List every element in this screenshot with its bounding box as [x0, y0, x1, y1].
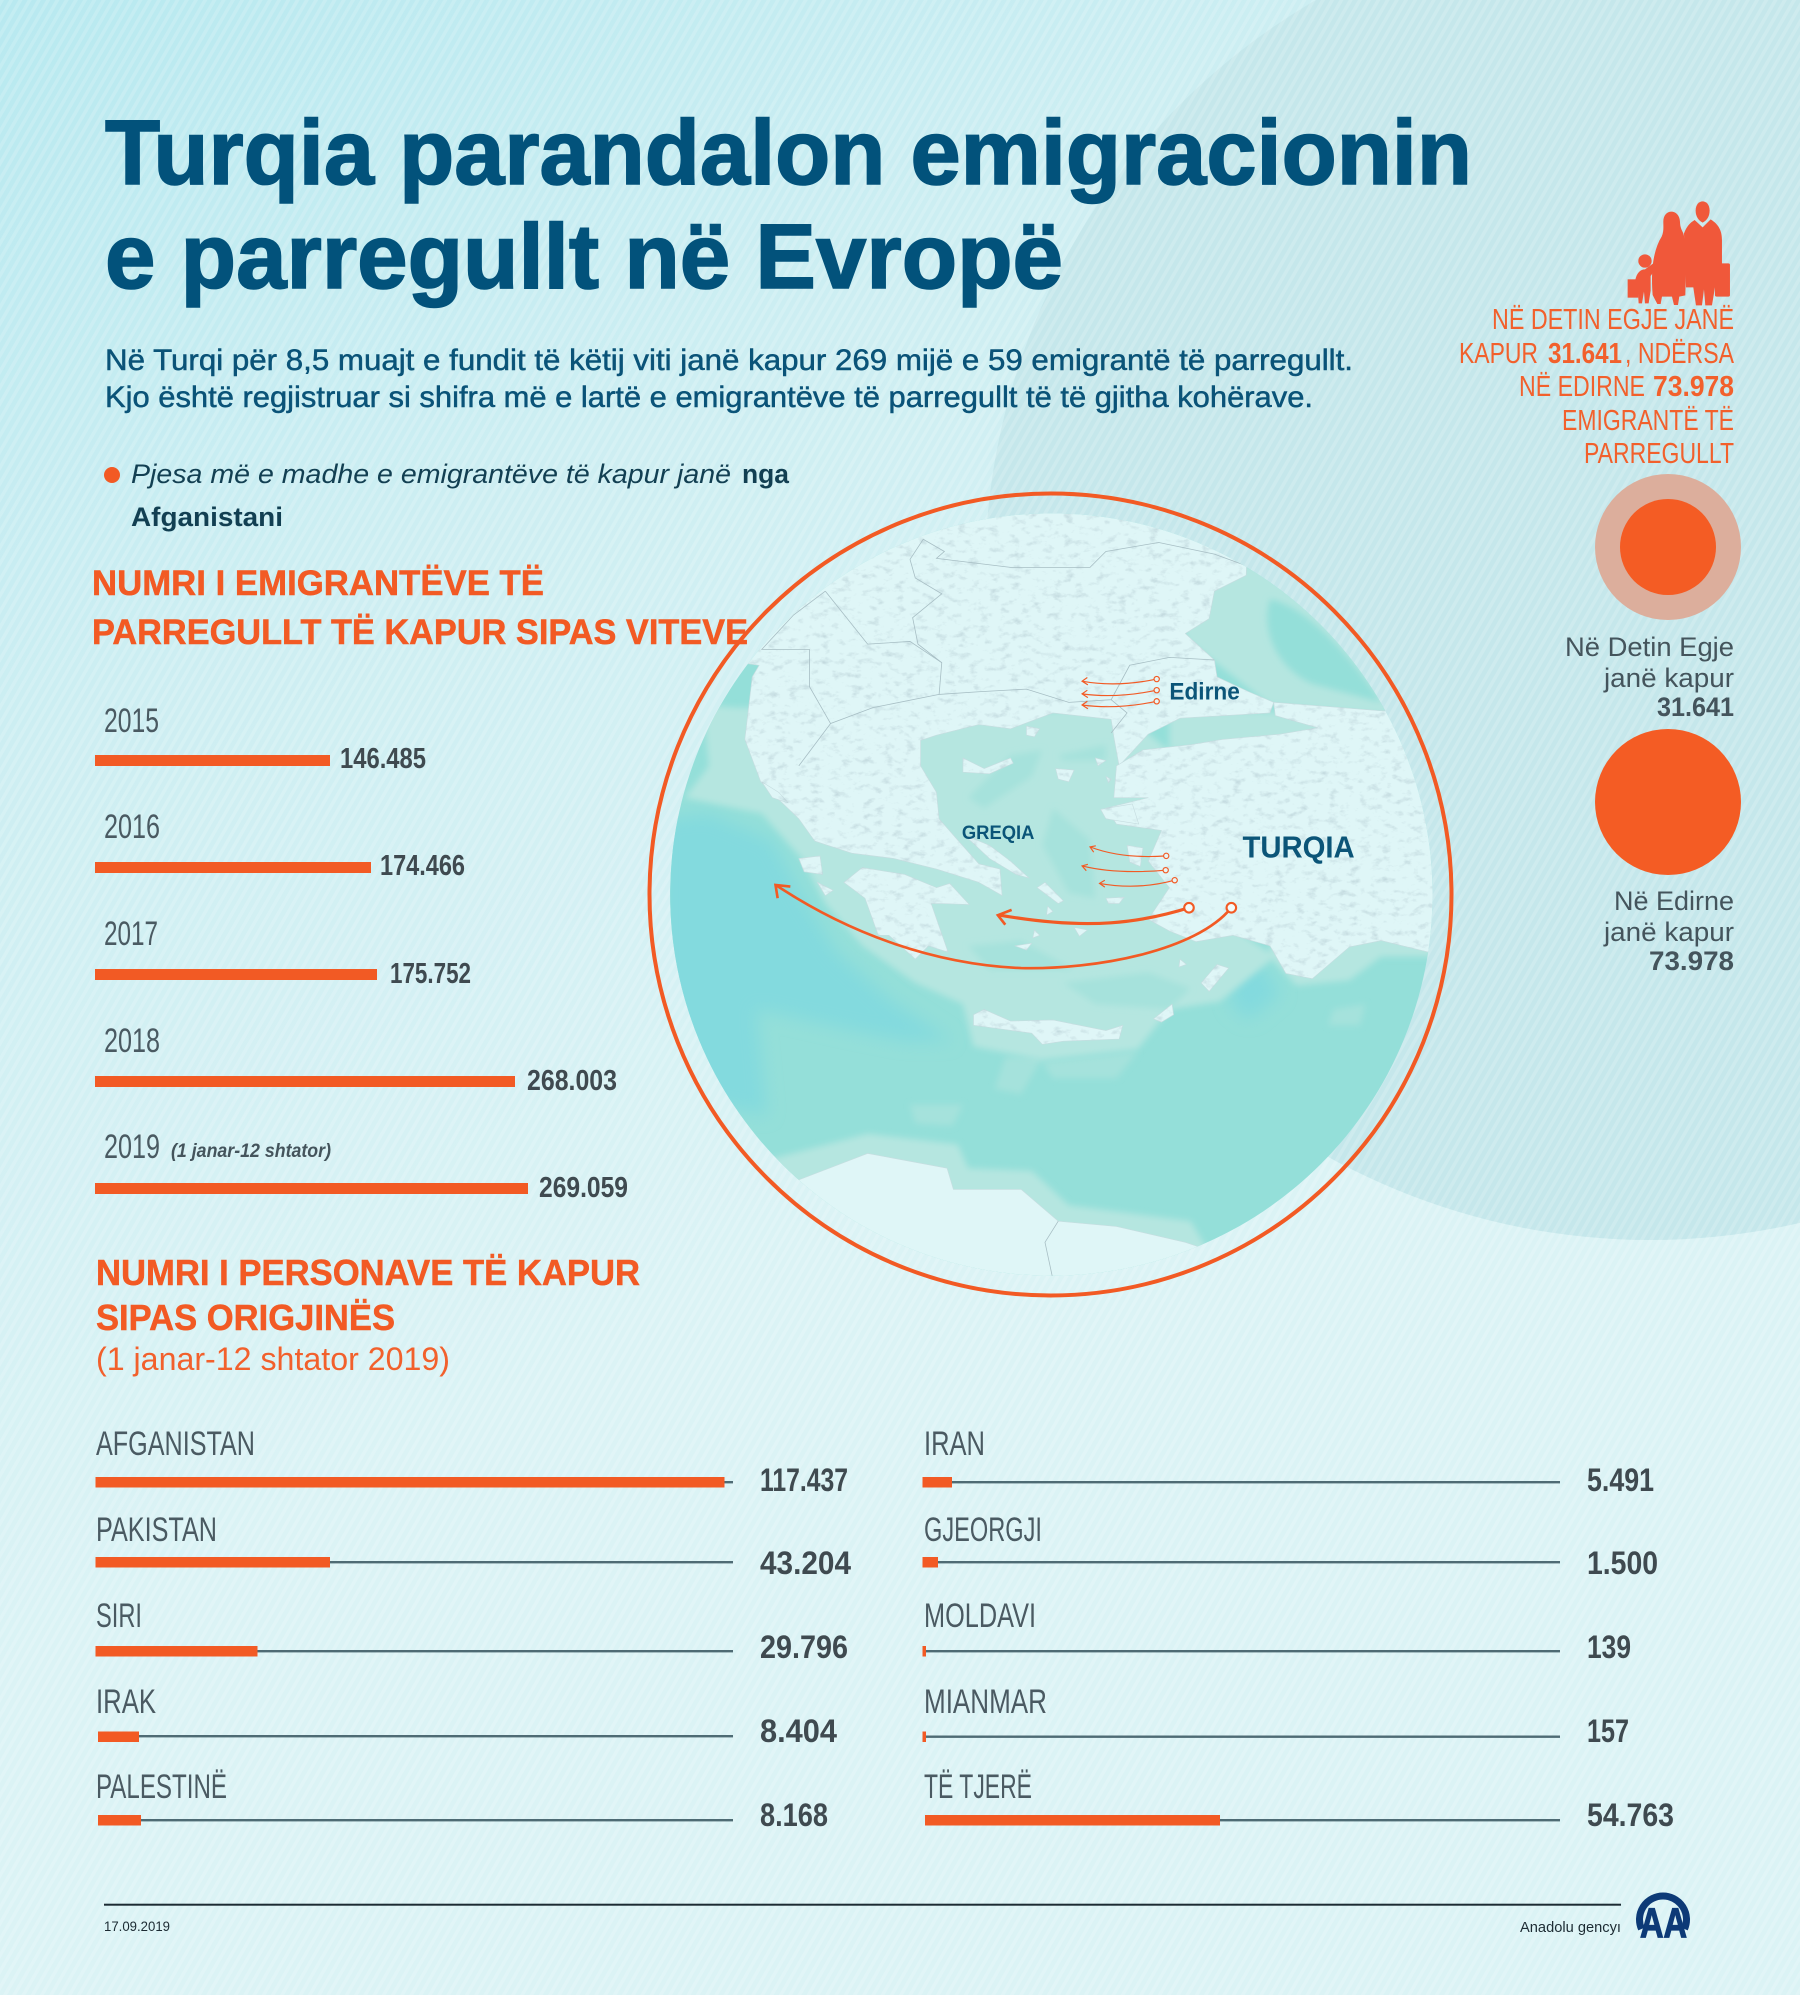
map: sea and land: [670, 514, 1432, 1276]
footer rule: [104, 1904, 1621, 1906]
2017: 2017: [104, 915, 158, 953]
note: most migrants from Afghanistan: Pjesa më e madhe e emigrantëve të kapur janë: [131, 459, 731, 489]
map labels: Edirne: [1169, 679, 1240, 706]
2016: [95, 808, 465, 882]
Iran: IRAN: [924, 1425, 985, 1463]
heading: by origin: (1 janar-12 shtator 2019): [96, 1341, 450, 1377]
Pakistan: [96, 1511, 851, 1581]
Mianmar: 157: [1587, 1713, 1629, 1749]
Afganistan: 117.437: [760, 1462, 848, 1498]
heading: yearly totals: NUMRI I EMIGRANTËVE TË: [92, 564, 544, 603]
date: 17.09.2019: [104, 1918, 170, 1934]
bullet: [104, 467, 120, 483]
Iran: 5.491: [1587, 1462, 1654, 1498]
Irak: [96, 1683, 837, 1749]
2017: 175.752: [390, 958, 471, 990]
callout: Aegean and Edirne totals: NË DETIN EGJE JANË: [1492, 304, 1734, 336]
callout: Aegean and Edirne totals: [1459, 304, 1735, 470]
note: most migrants from Afghanistan: [104, 459, 790, 532]
bar chart: origin left column: [96, 1425, 851, 1833]
intro paragraph: Kjo është regjistruar si shifra më e lartë e emigrantëve të parregullt të të gjitha kohërave.: [105, 381, 1313, 414]
Moldavi: MOLDAVI: [924, 1597, 1036, 1635]
label: Aegean Sea count: [1565, 632, 1734, 722]
Palestinë: PALESTINË: [96, 1768, 227, 1806]
icon: AA logo: AA: [1640, 1900, 1687, 1946]
heading: yearly totals: [92, 564, 748, 652]
2015: [95, 702, 426, 775]
heading: by origin: NUMRI I PERSONAVE TË KAPUR: [96, 1252, 640, 1293]
label: Edirne count: 73.978: [1649, 946, 1734, 976]
2019: 2019: [104, 1128, 160, 1166]
callout: Aegean and Edirne totals: EMIGRANTË TË: [1562, 405, 1734, 437]
large background circle: [985, 0, 1800, 1240]
label: Edirne count: Në Edirne: [1614, 886, 1734, 916]
bar chart: origin right column: [922, 1425, 1674, 1833]
2019: 269.059: [539, 1172, 628, 1204]
heading: by origin: [96, 1252, 640, 1377]
callout: Aegean and Edirne totals: 31.641: [1548, 338, 1622, 370]
title: Turqia parandalon emigracionin: [105, 102, 1472, 204]
arrow: short route across the Aegean: [998, 903, 1194, 925]
callout: Aegean and Edirne totals: 73.978: [1653, 371, 1734, 403]
bar chart: migrants by year: [95, 702, 628, 1204]
Pakistan: 43.204: [760, 1545, 851, 1581]
Siri: SIRI: [96, 1597, 142, 1635]
Siri: [96, 1597, 848, 1665]
Palestinë: [96, 1768, 828, 1833]
proportion circle: Aegean Sea: [1595, 474, 1741, 620]
shelves: [685, 705, 1275, 1060]
icon: migrant family: [1628, 201, 1730, 305]
2016: 174.466: [380, 850, 465, 882]
Moldavi: 139: [1587, 1629, 1631, 1665]
Gjeorgji: 1.500: [1587, 1545, 1658, 1581]
2018: 2018: [104, 1022, 160, 1060]
heading: yearly totals: PARREGULLT TË KAPUR SIPAS VITEVE: [92, 613, 748, 652]
Afganistan: AFGANISTAN: [96, 1425, 255, 1463]
intro paragraph: Në Turqi për 8,5 muajt e fundit të këtij viti janë kapur 269 mijë e 59 emigrantë të parregullt.: [105, 344, 1353, 377]
2015: 146.485: [340, 743, 426, 775]
2015: 2015: [104, 702, 159, 740]
land masses: [744, 513, 1432, 1276]
Moldavi: [922, 1597, 1631, 1665]
2018: 268.003: [527, 1065, 617, 1097]
label: Edirne count: janë kapur: [1603, 917, 1734, 947]
map labels: GREQIA: [962, 823, 1035, 844]
Mianmar: MIANMAR: [924, 1683, 1047, 1721]
Afganistan: [96, 1425, 848, 1498]
proportion circle: Edirne: [1595, 729, 1741, 875]
country borders: [762, 539, 1244, 1279]
Irak: 8.404: [760, 1713, 837, 1749]
callout: Aegean and Edirne totals: PARREGULLT: [1584, 438, 1734, 470]
map panel: [670, 514, 1432, 1276]
Të tjerë: 54.763: [1587, 1797, 1674, 1833]
callout: Aegean and Edirne totals: KAPUR: [1459, 338, 1538, 370]
note: most migrants from Afghanistan: nga: [742, 459, 790, 489]
Palestinë: 8.168: [760, 1797, 828, 1833]
label: Aegean Sea count: Në Detin Egje: [1565, 632, 1734, 662]
callout: Aegean and Edirne totals: NË EDIRNE: [1519, 371, 1645, 403]
Gjeorgji: [922, 1511, 1658, 1581]
Iran: [922, 1425, 1654, 1498]
label: Edirne count: [1603, 886, 1734, 976]
label: Aegean Sea count: janë kapur: [1603, 663, 1734, 693]
credit: Anadolu gencyı: [1520, 1919, 1621, 1936]
title: e parregullt në Evropë: [105, 206, 1063, 308]
Gjeorgji: GJEORGJI: [924, 1511, 1042, 1549]
2016: 2016: [104, 808, 160, 846]
title: [105, 102, 1472, 308]
map labels: TURQIA: [1242, 829, 1355, 864]
map labels: [962, 679, 1355, 864]
label: Aegean Sea count: 31.641: [1657, 692, 1734, 722]
heading: by origin: SIPAS ORIGJINËS: [96, 1297, 395, 1338]
intro paragraph: [105, 344, 1353, 414]
Të tjerë: TË TJERË: [924, 1768, 1032, 1806]
arrows: thin routes near Edirne and the Aegean: [1082, 676, 1177, 887]
Të tjerë: [924, 1768, 1674, 1833]
arrow: long route to Ionian Sea: [776, 885, 1236, 968]
note: most migrants from Afghanistan: Afganistani: [131, 502, 283, 532]
2018: [95, 1022, 617, 1097]
2017: [95, 915, 471, 990]
Pakistan: PAKISTAN: [96, 1511, 217, 1549]
Irak: IRAK: [96, 1683, 156, 1721]
callout: Aegean and Edirne totals: , NDËRSA: [1625, 338, 1735, 370]
Mianmar: [922, 1683, 1629, 1749]
Siri: 29.796: [760, 1629, 848, 1665]
2019: (1 janar-12 shtator): [171, 1141, 331, 1162]
2019: [95, 1128, 628, 1204]
map ring: [650, 494, 1452, 1296]
